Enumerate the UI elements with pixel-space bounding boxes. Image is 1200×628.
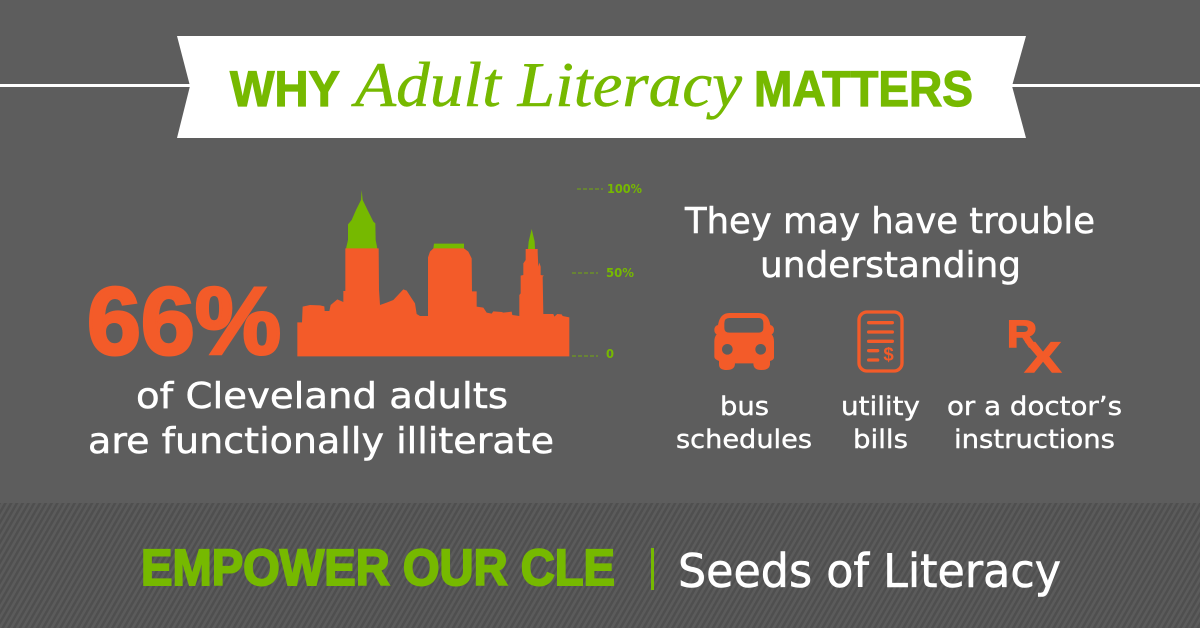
- label: doctor's instructions: or a doctor’s: [947, 392, 1122, 422]
- footer: Empower Our CLE: EMPOWER OUR CLE: [141, 539, 615, 596]
- title: matters: MATTERS: [754, 61, 973, 117]
- statistic: 66%: 66%: [87, 268, 281, 375]
- icon: prescription Rx: [1007, 314, 1061, 382]
- caption: Cleveland statistic: are functionally illiterate: [88, 421, 554, 462]
- axis: 0: 0: [606, 347, 614, 361]
- icon: prescription Rx: R: [1007, 314, 1037, 356]
- heading: trouble understanding: understanding: [760, 245, 1021, 286]
- skyline green portion: [346, 190, 535, 249]
- label: doctor's instructions: instructions: [954, 425, 1115, 455]
- heading: trouble understanding: They may have trouble: [684, 201, 1095, 242]
- label: utility bills: bills: [853, 425, 908, 455]
- heading: trouble understanding: [684, 201, 1095, 286]
- axis: 50%: [572, 266, 634, 280]
- skyline orange portion: [297, 248, 569, 356]
- footer band background: [0, 503, 1200, 628]
- title: why: WHY: [230, 61, 340, 117]
- icon: utility bill: $: [883, 344, 894, 365]
- icon: bus: [714, 313, 774, 370]
- white ribbon: [177, 36, 1026, 138]
- footer: Seeds of Literacy: Seeds of Literacy: [678, 544, 1061, 598]
- axis: 100%: [577, 182, 642, 196]
- footer divider: [651, 548, 654, 590]
- label: bus schedules: [676, 392, 812, 455]
- label: doctor's instructions: [947, 392, 1122, 455]
- caption: Cleveland statistic: [88, 376, 554, 462]
- banner side rule right: [1010, 84, 1200, 87]
- axis: 0: [572, 347, 614, 361]
- banner side rule left: [0, 84, 192, 87]
- caption: Cleveland statistic: of Cleveland adults: [136, 376, 508, 417]
- icon: utility bill: [859, 312, 902, 371]
- title: adult literacy script: Adult Literacy: [351, 49, 743, 120]
- label: utility bills: [841, 392, 920, 455]
- label: bus schedules: schedules: [676, 425, 812, 455]
- label: bus schedules: bus: [720, 392, 769, 422]
- axis: 50%: 50%: [606, 266, 634, 280]
- title banner: [0, 36, 1200, 138]
- axis: 100%: 100%: [607, 182, 642, 196]
- skyline chart: [297, 182, 642, 361]
- icon: prescription Rx: X: [1025, 334, 1061, 382]
- label: utility bills: utility: [841, 392, 920, 422]
